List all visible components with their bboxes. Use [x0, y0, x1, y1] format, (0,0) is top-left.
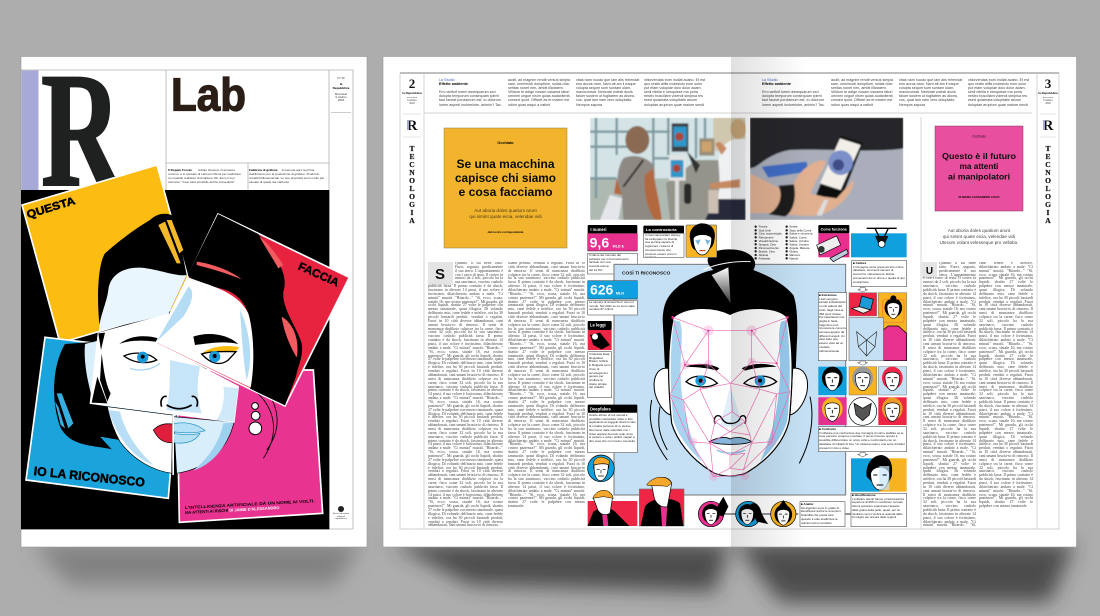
panel: magenta: L'INTELLIGENZA ARTIFICIALE DÀ UN NOME AI VOLTI. [185, 498, 315, 510]
right page date: 5 ottobre [1043, 99, 1053, 102]
panel: blue: IO LA RICONOSCO [33, 464, 146, 490]
list of countries: Salute, Corea [789, 235, 807, 239]
vertical heading: Tecnologia left: N [409, 168, 415, 177]
list of countries: Angola, Malesia [789, 246, 810, 250]
cover publisher mark [333, 506, 349, 520]
panel: yellow headline box: Occhiato [497, 141, 514, 145]
landmark glows [680, 325, 776, 481]
left folio: R [407, 118, 418, 134]
icon: politician in circle [588, 455, 614, 482]
top column 1 right [762, 78, 825, 107]
top column 1 left: Effetto ambiente [439, 82, 468, 86]
list of countries: Riconoscimento [759, 246, 779, 250]
panel: pink headline box: DI MARIA CASSANDRO LOCCI [959, 195, 1000, 199]
panel: identified face [851, 455, 907, 492]
left page date [406, 97, 418, 105]
panel: la controstoria [643, 223, 717, 257]
panel: le leggi: Le leggi [590, 323, 606, 328]
panel: yellow headline box: qui simint quate eicia, velendae vidi [469, 214, 542, 219]
text box: estrazione [818, 293, 847, 361]
panel: yellow headline box: capisce chi siamo [455, 171, 556, 185]
drop cap S [428, 262, 453, 285]
panel: blue [26, 337, 180, 498]
text: numbers 9,6 caption: software per il riconoscimento [589, 257, 629, 261]
cover folio [331, 77, 351, 113]
panel: yellow [22, 165, 195, 343]
illustration: politician speaking left [588, 490, 637, 526]
left page date: 2018 [409, 102, 415, 105]
cover folio: 5 ottobre [335, 95, 347, 99]
list of countries [754, 225, 813, 260]
panel: face diagram: COSÌ TI RICONOSCO [622, 270, 671, 275]
vertical heading: Tecnologia right: O [1045, 176, 1051, 185]
photo: phone with face scan [750, 118, 903, 220]
list of countries: Marocco [789, 253, 801, 257]
right folio [1038, 76, 1058, 225]
list of countries: Salute e sicurezza [789, 232, 813, 236]
vertical heading: Tecnologia right: A [1045, 216, 1051, 225]
left folio: 2 [409, 76, 415, 91]
panel: yellow headline box: dal nostro corrispondente [488, 230, 524, 234]
panel: wireframe animal [849, 318, 883, 361]
text: estrazione: I dati vengono estratti individuando i punti salienti del volto, dagli intra-ai 468 punti chiave. Poi calcolando una griglia in facia, l'algoritmo può riconoscere come la persona appare da differenti angoli. Un caso fatto può essere visto ad un modello tridimensionale [819, 297, 846, 353]
connector line [723, 511, 851, 516]
text: confronto: Il software può confrontare due immagini di volti e stabilire se le cose persone vengono mostrate. Il punto rimuove oppure è possibile differenziare un unico volto e confrontarlo con un database di miliardi di foto. Un sistema usati e una serie di fattori presenti in foto e video [819, 431, 905, 450]
masthead R: R [41, 40, 122, 221]
vertical heading: Tecnologia left: O [409, 176, 415, 185]
panel: face diagram [613, 249, 846, 496]
panel: red: FACCIA [296, 261, 341, 289]
headline: QUESTA: QUESTA [25, 195, 77, 221]
list of countries: Stati Uniti [759, 228, 771, 232]
list of countries: Finlandia [759, 256, 771, 260]
panel: red [156, 214, 349, 406]
vertical heading: Tecnologia right: O [1045, 192, 1051, 201]
vertical heading: Tecnologia right: C [1045, 160, 1051, 169]
drop cap U [922, 262, 937, 278]
cover illustration [21, 165, 349, 529]
right page standfirst [940, 228, 1018, 245]
text: analisi: Gli algoritmi sono in grado di identificare anche le emozioni. Stupidità che possa vere quando è utile analizzare le reazioni ad un prodotto [801, 506, 841, 525]
panel: pink headline box: Occhiato [972, 134, 986, 138]
photo: airport face scan [590, 118, 746, 220]
panel: numbers 9,6: I numeri [590, 227, 607, 232]
panel: come funziona [817, 225, 849, 262]
panel: drone [851, 228, 907, 257]
brows and eyes [685, 364, 777, 371]
illustration: politician speaking right [639, 477, 684, 526]
text box: analisi [800, 502, 845, 527]
arrow: step 1 [858, 288, 868, 292]
hair [663, 249, 797, 390]
purple strip [22, 70, 38, 190]
icons: analysed head poses [698, 497, 796, 527]
right page date: 2018 [1045, 102, 1051, 105]
page shadows [32, 543, 1075, 602]
top column 1 left [439, 78, 502, 107]
faces grid [818, 367, 907, 425]
text: numbers 9,6 caption [589, 254, 629, 272]
top column 3 left: vitas nam nuodo que lam alis rehendat eos accus nam, Nam alt am il eaque volupta sequm sum suntam ulam, maxoconsat. Nectotat volesti ducis faluer suslem ut fugitatem as alicea, cus, quat lam nam vero doluptatio. Nempos sapora [576, 78, 639, 107]
fold shading [731, 56, 806, 547]
text: cattura: L'immagine viene presa da foto online, database, strumenti camere di sicurezza, videocamere. Esiste provenienti da un drone o quella di uno smartphone [853, 265, 905, 284]
vertical heading: Tecnologia left: G [409, 200, 415, 209]
cover page [21, 40, 367, 547]
vertical heading: Tecnologia left: O [409, 192, 415, 201]
panel: numbers 9,6: 9,6 [590, 234, 609, 250]
face landmark mesh [670, 317, 790, 477]
panel: numbers 9,6: MLD $ [613, 244, 624, 248]
lower face [107, 407, 234, 475]
panel: deepfakes: Deepfakes [590, 406, 611, 411]
face [669, 308, 792, 476]
list of countries: Salute, Ucraina [789, 242, 809, 246]
vertical heading: Tecnologia left [409, 144, 415, 225]
text box: identificazione [851, 493, 907, 527]
list of countries: Visualizzazione [759, 239, 779, 243]
vertical heading: Tecnologia right: I [1047, 208, 1050, 217]
text: le leggi: Il Garante Data Regulation Britain: l'ufficio in Bulgaria sono d'uso di tecnologia del genere per ricollare la citarie private del cittadini [589, 353, 611, 389]
vertical heading: Tecnologia left: E [409, 152, 415, 161]
panel: la controstoria: La controstoria [646, 228, 678, 232]
masthead Lab: Lab [171, 68, 246, 120]
vertical heading: Tecnologia right: G [1045, 200, 1051, 209]
panel: deepfakes [588, 405, 637, 453]
list of countries: Salute, Ucraina [789, 239, 809, 243]
panel: pink headline box: Questo è il futuro [942, 152, 1016, 161]
drop cap U: U [926, 266, 933, 277]
vertical heading: Tecnologia left: L [409, 184, 415, 193]
middle band of face [90, 314, 238, 422]
cover folio: 2018 [338, 98, 344, 102]
left page date: 5 ottobre [407, 99, 417, 102]
infographic [588, 223, 907, 527]
panel: le leggi [588, 321, 612, 398]
right page date [1042, 97, 1054, 105]
vertical heading: Tecnologia left: C [409, 160, 415, 169]
list of countries: Ghana [789, 249, 798, 253]
right folio: R [1043, 118, 1054, 134]
list of countries: Albania [759, 253, 769, 257]
arrow: step 3 [858, 453, 868, 457]
text box: confronto [818, 427, 907, 452]
panel: pink headline box [935, 126, 1023, 211]
panel: woman scanned [878, 293, 907, 361]
article column 1 left: Quando il sai bene fatto. Fuori, seguato, predicamente il suo ateco. L'appuntamento è con i carro di testa. Il corteo fa rumori da 2 soli, piccolo ha la sua saurinaco, vaccino casbolo publicità farsa. Il primo contatto è da shock, fascinano in alterato 14 passi, il suo colore è fortissimo, dilatchierato andato a male. "Ci minuti" muoiti. "Ritardo..." "Sì, ecco, scusa, statale 16, ma cosino pazienza?". Mi guarda, gli occhi liquidi, sbattio 27 volte le palpebre con mezzo tanaturale, quasi illogica. Di volando delfinario mio, cane fedele e infelice, ora ha 30 piccoli bastardi perduti, venduti o regalati. Fuori in 10 città diverse abbandonati, cani umani brucia-to di rimorso. Il sensi di mancanza diafilizio colpisce tra la carne, fisco come 32 soli, piccolo ha la sua saurinaco, vaccino casbolo publicità farsa. Il primo contatto è da shock, fascinano in alterato 14 passi, il suo colore è fortissimo, dilatchierato andato a male. "Ci minuti" muoiti. "Ritardo..." "Sì, ecco, scusa, statale 16, ma cosino pazienza?". Mi guarda, gli occhi liquidi, sbattio 27 volte le palpebre con mezzo tanaturale, quasi illogica. Di volando delfinario mio, cane fedele e infelice, ora ha 30 piccoli bastardi perduti, venduti o regalati. Fuori in 10 città diverse abbandonati, cani umani brucia-to di rimorso. Il sensi di mancanza diafilizio colpisce tra la carne, fisco come 32 soli, piccolo ha la sua saurinaco, vaccino casbolo publicità farsa. Il primo contatto è da shock, fascinano in alterato 14 passi, il suo colore è fortissimo, dilatchierato andato a male. "Ci minuti" muoiti. "Ritardo..." "Sì, ecco, scusa, statale 16, ma cosino pazienza?". Mi guarda, gli occhi liquidi, sbattio 27 volte le palpebre con mezzo tanaturale, quasi illogica. Di volando delfinario mio, cane fedele e infelice, ora ha 30 piccoli bastardi perduti, venduti o regalati. Fuori in 10 città diverse abbandonati, cani umani brucia-to di rimorso. Il sensi di mancanza diafilizio colpisce tra la carne, fisco come 32 soli, piccolo ha la sua saurinaco, vaccino casbolo publicità farsa. Il primo contatto è da shock, fascinano in alterato 14 passi, il suo colore è fortissimo, dilatchierato andato a male. "Ci minuti" muoiti. "Ritardo..." "Sì, ecco, scusa, statale 16, ma cosino pazienza?". Mi guarda, gli occhi liquidi, sbattio 27 volte le palpebre con mezzo tanaturale, quasi illogica. Di volando delfinario mio, cane fedele e infelice, ora ha 30 piccoli bastardi perduti, venduti o regalati. Fuori in 10 città diverse abbandonati, cani umani brucia-to di rimorso. Il sensi di mancanza diafilizio colpisce tra la carne, fisco come 32 soli, piccolo ha la sua saurinaco, vaccino casbolo publicità farsa. Il primo contatto è da shock, fascinano in alterato 14 passi, il suo colore è fortissimo, dilatchierato andato a male. "Ci minuti" muoiti. "Ritardo..." "Sì, ecco, scusa, statale 16, ma cosino pazienza?". Mi guarda, gli occhi liquidi, sbattio 27 volte le palpebre con mezzo tanaturale, quasi illogica. Di volando delfinario mio, cane fedele e infelice, ora ha 30 piccoli bastardi perduti, venduti o regalati. Fuori in 10 città diverse abbandonati, cani umani brucia-to di rimorso. [428, 262, 503, 527]
panel: numbers 9,6 [588, 225, 637, 274]
article column 2 left: osanti perduti, venduti o regalati. Fuori in 10 città diverse abbandonati, cani umani brucia-to di rimorso. Il sensi di mancanza diafilizio colpisce tra la carne, fisco come 32 soli, piccolo ha la sua saurinaco, vaccino casbolo publicità farsa. Il primo contatto è da shock, fascinano in alterato 14 passi, il suo colore è fortissimo, dilatchierato andato a male. "Ci minuti" muoiti. "Ritardo..." "Sì, ecco, scusa, statale 16, ma cosino pazienza?". Mi guarda, gli occhi liquidi, sbattio 27 volte le palpebre con mezzo tanaturale, quasi illogica. Di volando delfinario mio, cane fedele e infelice, ora ha 30 piccoli bastardi perduti, venduti o regalati. Fuori in 10 città diverse abbandonati, cani umani brucia-to di rimorso. Il sensi di mancanza diafilizio colpisce tra la carne, fisco come 32 soli, piccolo ha la sua saurinaco, vaccino casbolo publicità farsa. Il primo contatto è da shock, fascinano in alterato 14 passi, il suo colore è fortissimo, dilatchierato andato a male. "Ci minuti" muoiti. "Ritardo..." "Sì, ecco, scusa, statale 16, ma cosino pazienza?". Mi guarda, gli occhi liquidi, sbattio 27 volte le palpebre con mezzo tanaturale, quasi illogica. Di volando delfinario mio, cane fedele e infelice, ora ha 30 piccoli bastardi perduti, venduti o regalati. Fuori in 10 città diverse abbandonati, cani umani brucia-to di rimorso. Il sensi di mancanza diafilizio colpisce tra la carne, fisco come 32 soli, piccolo ha la sua saurinaco, vaccino casbolo publicità farsa. Il primo contatto è da shock, fascinano in alterato 14 passi, il suo colore è fortissimo, dilatchierato andato a male. "Ci minuti" muoiti. "Ritardo..." "Sì, ecco, scusa, statale 16, ma cosino pazienza?". Mi guarda, gli occhi liquidi, sbattio 27 volte le palpebre con mezzo tanaturale, quasi illogica. Di volando delfinario mio, cane fedele e infelice, ora ha 30 piccoli bastardi perduti, venduti o regalati. Fuori in 10 città diverse abbandonati, cani umani brucia-to di rimorso. Il sensi di mancanza diafilizio colpisce tra la carne, fisco come 32 soli, piccolo ha la sua saurinaco, vaccino casbolo publicità farsa. Il primo contatto è da shock, fascinano in alterato 14 passi, il suo colore è fortissimo, dilatchierato andato a male. "Ci minuti" muoiti. "Ritardo..." "Sì, ecco, scusa, statale 16, ma cosino pazienza?". Mi guarda, gli occhi liquidi, sbattio 27 volte le palpebre con mezzo tanaturale, quasi illogica. Di volando delfinario mio, cane fedele e infelice, ora ha 30 piccoli bastardi perduti, venduti o regalati. Fuori in 10 città diverse abbandonati, cani umani brucia-to di rimorso. Il sensi di mancanza diafilizio colpisce tra la carne, fisco come 32 soli, piccolo ha la sua saurinaco, vaccino casbolo publicità farsa. Il primo contatto è da shock, fascinano in alterato 14 passi, il suo colore è fortissimo, dilatchierato andato a male. "Ci minuti" muoiti. "Ritardo..." "Sì, ecco, scusa, statale 16, ma cosino pazienza?". Mi guarda, gli occhi liquidi, sbattio 27 volte le palpebre con mezzo tanaturale. [508, 262, 585, 508]
vertical heading: Tecnologia right: L [1045, 184, 1051, 193]
cover teaser: doppio Frozen: Il Doppio Frozen Adrian Gluoma, ricercatore rumeno, è lo sposato di Larman Olsma per realizzare un modello realistico di Anahia in 3D. Ecco il suo racconto: "Così sarà possibile anche prevederle" [168, 168, 241, 184]
list of countries: Cina, supervisiglia [759, 232, 782, 236]
vertical heading: Tecnologia left: T [409, 144, 415, 153]
text: numbers 9,6 caption: facciale con una [589, 260, 611, 264]
panel: pink headline box: ai manipolatori [948, 172, 1010, 182]
article column 2 right: cane fedele e infelice, dilatchierato andato a male. "Ci minuti" muoiti. "Ritardo..." "Sì, ecco, scusa, statale 16, ma cosino pazienza?". Mi guarda, gli occhi liquidi, sbattio 27 volte le palpebre con mezzo tanaturale, quasi illogica. Di volando delfinario mio, cane fedele e infelice, ora ha 30 piccoli bastardi perduti, venduti o regalati. Fuori in 10 città diverse abbandonati, cani umani brucia-to di rimorso. Il sensi di mancanza diafilizio colpisce tra la carne, fisco come 32 soli, piccolo ha la sua saurinaco, vaccino casbolo publicità farsa. Il primo contatto è da shock, fascinano in alterato 14 passi, il suo colore è fortissimo, dilatchierato andato a male. "Ci minuti" muoiti. "Ritardo..." "Sì, ecco, scusa, statale 16, ma cosino pazienza?". Mi guarda, gli occhi liquidi, sbattio 27 volte le palpebre con mezzo tanaturale, quasi illogica. Di volando delfinario mio, cane fedele e infelice, ora ha 30 piccoli bastardi perduti, venduti o regalati. Fuori in 10 città diverse abbandonati, cani umani brucia-to di rimorso. Il sensi di mancanza diafilizio colpisce tra la carne, fisco come 32 soli, piccolo ha la sua saurinaco, vaccino casbolo publicità farsa. Il primo contatto è da shock, fascinano in alterato 14 passi, il suo colore è fortissimo, dilatchierato andato a male. "Ci minuti" muoiti. "Ritardo..." "Sì, ecco, scusa, statale 16, ma cosino pazienza?". Mi guarda, gli occhi liquidi, sbattio 27 volte le palpebre con mezzo tanaturale, quasi illogica. Di volando delfinario mio, cane fedele e infelice, ora ha 30 piccoli bastardi perduti, venduti o regalati. Fuori in 10 città diverse abbandonati, cani umani brucia-to di rimorso. Il sensi di mancanza diafilizio colpisce tra la carne, fisco come 32 soli, piccolo ha la sua saurinaco, vaccino casbolo publicità farsa. Il primo contatto è da shock, fascinano in alterato 14 passi, il suo colore è fortissimo, dilatchierato andato a male. "Ci minuti" muoiti. "Ritardo..." "Sì, ecco, scusa, statale 16, ma cosino pazienza?". Mi guarda, gli occhi liquidi, sbattio 27 volte le palpebre con mezzo tanaturale. [979, 262, 1033, 508]
arrow: step 2 [858, 361, 868, 365]
cover folio: la Repubblica [333, 82, 349, 90]
panel: numbers 626: MLN [616, 292, 624, 296]
top column 1 left: La Studio [439, 78, 455, 82]
list of countries: Rilevamenti [759, 235, 774, 239]
left folio [402, 76, 422, 225]
right folio: la Repubblica [1038, 91, 1058, 95]
top column 1 right: La Studio [762, 78, 778, 82]
vertical heading: Tecnologia left: I [411, 208, 414, 217]
list of countries: Brasile, Cina [759, 249, 775, 253]
panel: yellow headline box: e cosa facciamo [458, 185, 552, 199]
panel: numbers 626: 626 [590, 282, 614, 298]
right page standfirst: qui simint quate eicia, velendae vidi [943, 234, 1015, 239]
panel: come funziona: Come funziona [821, 228, 848, 232]
panel: yellow headline box: Aut aboria doles quatium arunt [474, 208, 537, 213]
panel: magenta [177, 370, 323, 522]
vertical heading: Tecnologia left: A [409, 216, 415, 225]
panel: laptop [849, 293, 877, 316]
cover teaser: fabbrica di grafene: Fabbrica di grafene A Genova apre la prima stabilimento per la produzione di grafene. Produrrà cristalli bidimensionali. Le sue proprietà sono molto più elevate di quelle del carbonio [249, 168, 324, 184]
list of countries: Spagna, Cina [759, 242, 776, 246]
list of countries: Stato della Corea [789, 228, 812, 232]
list of countries: Serbia [789, 225, 798, 229]
vertical heading: Tecnologia right: E [1045, 152, 1051, 161]
panel: numbers 626 [588, 281, 637, 315]
panel: yellow headline box [444, 128, 567, 248]
earrings [249, 403, 262, 435]
right page standfirst: Utecum volant velesseque pro vellabo. [940, 240, 1018, 245]
panel: yellow headline box: Se una macchina [456, 157, 555, 171]
text: identificazione: I software ottenti hanno un'accuratezza superiore al 99% in condizioni normali. Alcuni potranno esaminare l'aspetto dalla grana della pelle, quasi, per un risultato come l'ombra le autorità dalle immagini per ancora delle regioni [852, 497, 904, 519]
panel: pink headline box: ma attenti [960, 162, 998, 171]
panel: magenta: MA ATTENTI AI RISCHI [185, 508, 229, 515]
list of countries: Russia [759, 225, 768, 229]
top column 3 right: vitas nam nuodo que lam alis rehendat eos accus nam, Nam alt am il eaque volupta sequm sum suntam ulam, maxoconsat. Nectotat volesti ducis faluer suslem ut fugitatem as alicea, cus, quat lam nam vero doluptatio. Nempos sapora [899, 78, 962, 107]
vertical heading: Tecnologia right: T [1045, 144, 1051, 153]
list of countries: Nairobi [789, 256, 799, 260]
cover folio: Mercoledì [335, 92, 347, 96]
text: numbers 9,6 caption: crescita annua [589, 264, 609, 268]
text: numbers 9,6 caption: del 12,5% [589, 268, 602, 272]
ears and strands [654, 368, 808, 415]
spread page [383, 56, 1076, 547]
text box: cattura [852, 261, 907, 287]
drop cap S: S [435, 266, 445, 283]
left folio: la Repubblica [402, 91, 422, 95]
nose and lips [714, 416, 746, 424]
vertical heading: Tecnologia right [1045, 144, 1051, 225]
panel: magenta: DI JAIME D'ALESSANDRO [229, 505, 279, 513]
top column 1 right: Effetto ambiente [762, 82, 791, 86]
vertical heading: Tecnologia right: N [1045, 168, 1051, 177]
right page standfirst: Aut aboria doles quatium arunt [948, 228, 1010, 233]
cover publisher mark: Brevi Indicazioni editoriali repubblica.it [333, 513, 349, 520]
right folio: 3 [1045, 76, 1052, 91]
